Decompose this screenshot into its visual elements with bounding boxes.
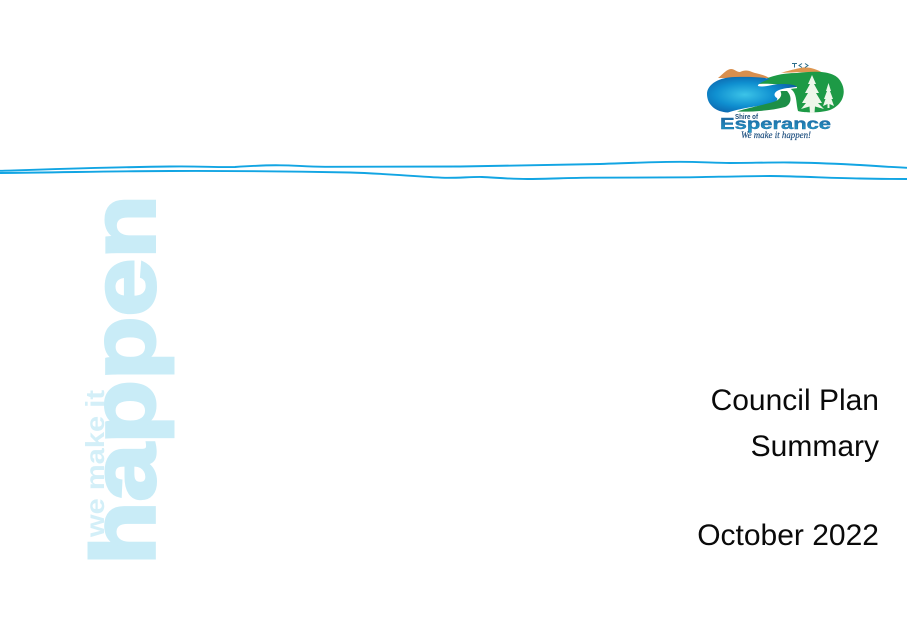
subtitle: Summary: Summary — [751, 430, 879, 463]
logo artwork: lake, hills and pines — [707, 64, 844, 113]
logo text: Esperance: Esperance — [720, 116, 831, 133]
watermark words: we make it: we make it — [80, 390, 110, 538]
small pine tree — [823, 83, 834, 108]
large pine tree — [801, 75, 824, 113]
double blue wave lines — [0, 162, 907, 179]
green hills and headland — [757, 72, 844, 112]
left orange mountains — [718, 69, 769, 78]
vertical watermark: we make it happen — [74, 195, 174, 565]
logo: Shire of Esperance — [707, 64, 844, 140]
watermark word: happen: happen — [74, 195, 174, 565]
green lower bank — [737, 91, 791, 112]
blue lake — [707, 77, 797, 112]
white river edge — [780, 88, 797, 91]
small bird marks — [792, 64, 808, 68]
logo text: tagline: We make it happen! — [741, 130, 811, 140]
date: October 2022: October 2022 — [697, 519, 879, 552]
logo text: Shire of: Shire of — [735, 112, 758, 121]
title: Council Plan: Council Plan — [711, 384, 879, 417]
right orange mountains — [781, 67, 823, 73]
